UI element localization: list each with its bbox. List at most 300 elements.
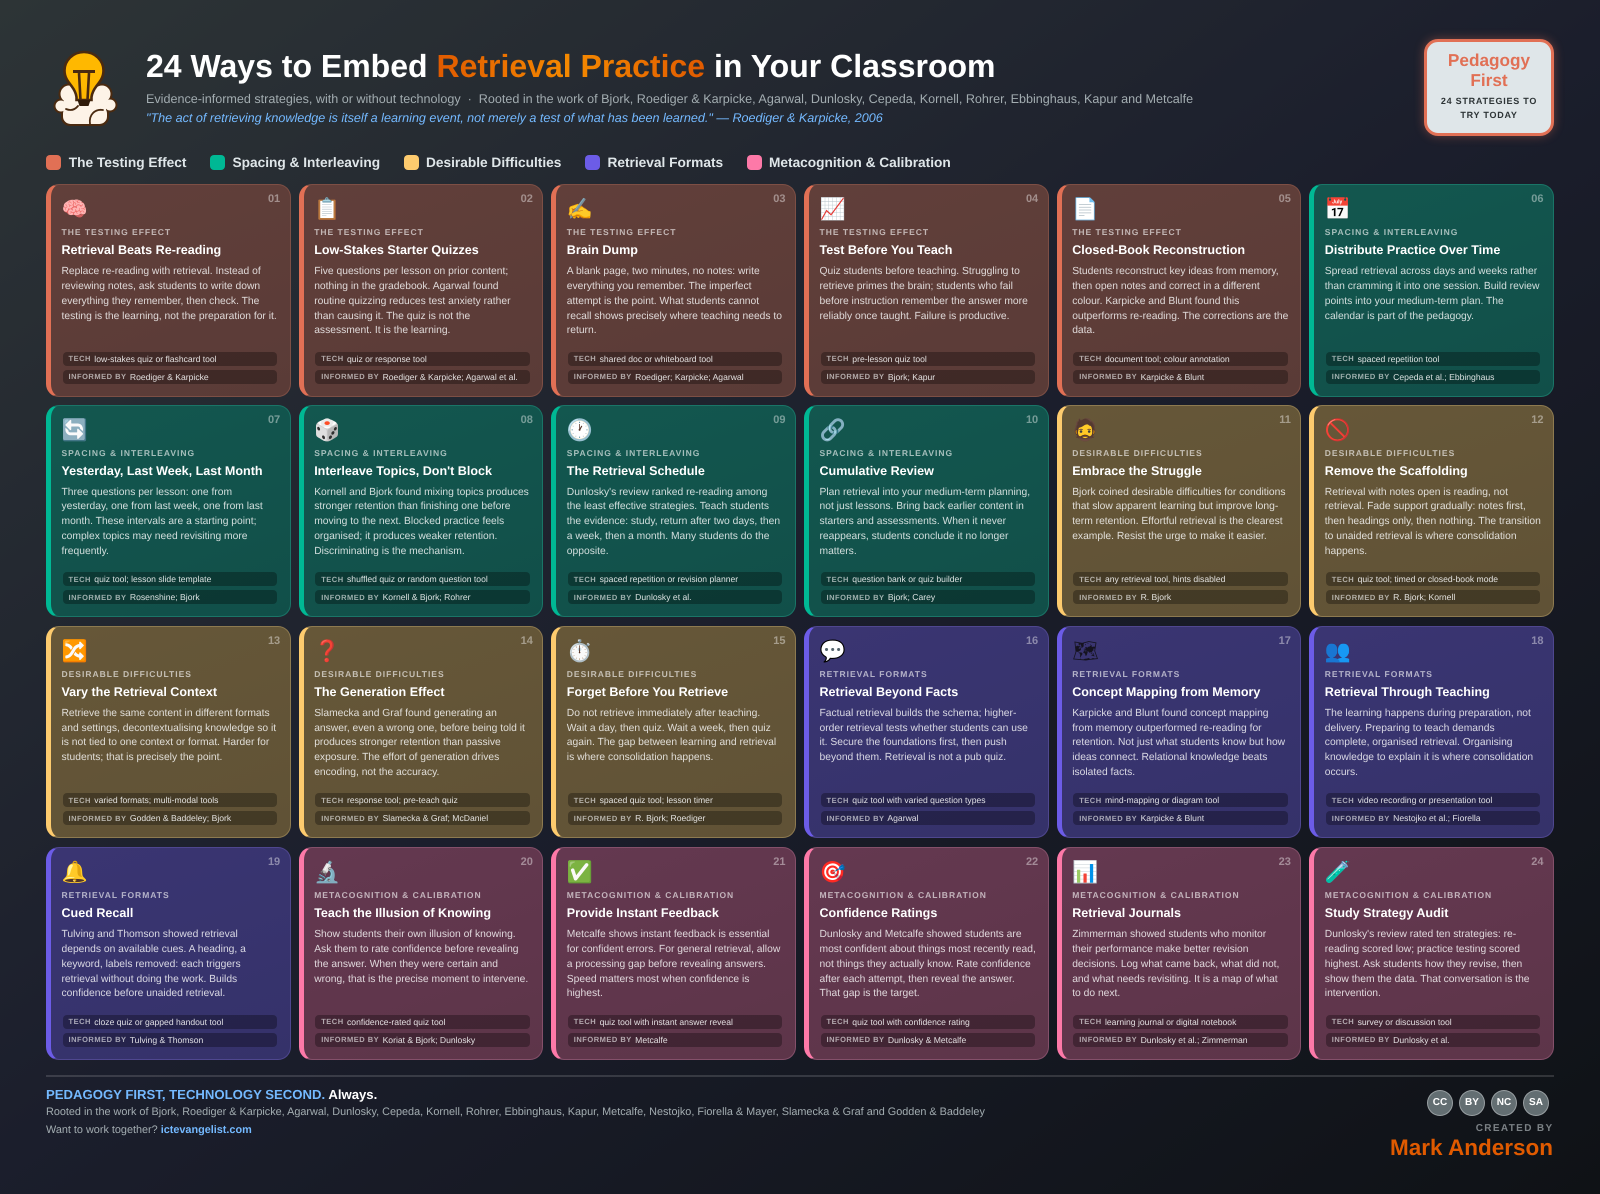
tech: TECH cloze quiz or gapped handout tool [68,1016,223,1026]
licence icon: CC [1427,1090,1453,1116]
number: 17 [1279,635,1291,647]
body: to do next. [1072,988,1120,999]
informed by [1326,811,1540,825]
informed by: INFORMED BY R. Bjork [1079,592,1171,602]
tech [62,793,277,807]
body: complete, organised retrieval. Organising [1325,737,1513,748]
badge: 24 STRATEGIES TO [1441,96,1537,106]
body: the least effective strategies. Teach students [567,501,769,512]
title: 24 Ways to Embed Retrieval Practice in Your Classroom [146,48,996,84]
informed by: INFORMED BY Bjork; Carey [826,592,935,602]
informed by [315,590,530,604]
category: SPACING & INTERLEAVING [1325,227,1458,237]
body: organised; it produces weaker retention. [314,531,497,542]
number: 08 [521,414,533,426]
body: reappears, students conclude it no longer [820,531,1008,542]
icon: clipboard: 📋 [314,198,340,222]
body: again. The gap between learning and retrieval [567,737,776,748]
body: complex topics may need revisiting more [62,531,248,542]
number: 12 [1531,414,1543,426]
panel: card 15 [551,626,796,838]
body: Spread retrieval across days and weeks rather [1325,266,1537,277]
tech: TECH mind-mapping or diagram tool [1079,795,1219,805]
informed by [315,1032,530,1046]
panel: card 01 [46,184,291,396]
category: METACOGNITION & CALIBRATION [1325,890,1492,900]
icon: shuffle: 🔀 [62,640,88,664]
body: A blank page, two minutes, no notes: write [567,266,760,277]
body: knowledge to explain it is where consolidation [1325,752,1533,763]
number: 16 [1026,635,1038,647]
tech [820,793,1035,807]
panel: card 22 [804,847,1049,1060]
informed by: INFORMED BY Dunlosky et al.; Zimmerman [1079,1034,1248,1044]
icon: chart: 📈 [820,198,846,222]
body: Quiz students before teaching. Struggling to [820,266,1020,277]
body: moving to the next. Blocked practice feels [314,516,504,527]
body: reading scored low; practice testing scored [1325,944,1520,955]
body: Wait a day, then quiz. Wait a week, then quiz [567,723,771,734]
tech [62,1014,277,1028]
legend swatch: testing effect [46,155,61,170]
body: Ask them to rate confidence before revealing [314,944,519,955]
licence icon: BY: BY [1465,1097,1479,1108]
panel: card 21 [551,847,796,1060]
informed by [62,590,277,604]
card title: Distribute Practice Over Time [1325,243,1500,257]
tech [568,572,782,586]
panel: card 14 [299,626,543,838]
body: Dunlosky's review rated ten strategies: re- [1325,929,1516,940]
tech [568,1014,782,1028]
tech: TECH quiz or response tool [321,354,427,364]
informed by: INFORMED BY Roediger; Karpicke; Agarwal [574,372,744,382]
body: their performance make better revision [1072,944,1248,955]
created by label: CREATED BY [1476,1122,1554,1134]
body: That gap is the target. [820,988,920,999]
body: starters and assessments. When it never [820,516,1006,527]
panel: card 07 [46,404,291,617]
body: yesterday, one from last week, one from last [62,501,263,512]
icon: calendar: 📅 [1325,198,1351,222]
card title: Brain Dump [567,243,638,257]
panel: card 23 [1057,847,1301,1060]
informed by [315,370,530,384]
badge: Pedagogy [1448,50,1530,70]
card title: Cumulative Review [820,464,934,478]
body [62,266,277,322]
panel: card 20 [299,847,543,1060]
informed by: INFORMED BY Karpicke & Blunt [1079,372,1204,382]
tech: TECH quiz tool with varied question types [826,795,986,805]
tech: TECH quiz tool; lesson slide template [68,574,211,584]
informed by [820,370,1035,384]
panel: card 06 [1309,184,1554,396]
icon: link: 🔗 [820,418,846,442]
body: beyond them. Retrieval is not a pub quiz. [820,752,1006,763]
body: reviewing notes, ask students to write down [62,281,260,292]
body: testing is the learning, not the preparation for it. [62,311,277,322]
number: 03 [773,193,785,205]
author name: Mark Anderson [1390,1135,1553,1160]
body: everything you remember. The imperfect [567,281,751,292]
body [314,708,525,778]
body: Three questions per lesson: one from [62,487,232,498]
tech [820,352,1035,366]
icon: check mark: ✅ [567,861,593,885]
informed by [1073,1032,1288,1046]
legend label: spacing: Spacing & Interleaving [232,155,380,170]
card title: Vary the Retrieval Context [62,685,217,699]
number: 01 [268,193,280,205]
card title: Teach the Illusion of Knowing [314,906,491,920]
body: from memory outperformed re-reading for [1072,723,1262,734]
body: after each attempt, then reveal the answer. [820,974,1015,985]
body [314,266,511,336]
body: a processing gap before revealing answers. [567,959,766,970]
category: SPACING & INTERLEAVING [314,448,448,458]
footer tagline: PEDAGOGY FIRST, TECHNOLOGY SECOND. Always. [46,1087,377,1102]
body: it. Secure the foundations first, then push [820,737,1007,748]
body: calendar is part of the pedagogy. [1325,311,1474,322]
body: Kornell and Bjork found mixing topics produces [314,487,529,498]
tech: TECH quiz tool; timed or closed-book mode [1332,574,1498,584]
informed by: INFORMED BY Nestojko et al.; Fiorella [1332,813,1481,823]
body: Students reconstruct key ideas from memory, [1072,266,1279,277]
tech [315,1014,530,1028]
legend swatch: metacognition [746,155,762,170]
body: retrieve primes the brain; students who fail [820,281,1013,292]
informed by [568,1032,782,1046]
informed by: INFORMED BY Roediger & Karpicke [68,372,209,382]
body: before instruction remember the answer more [820,296,1028,307]
category: RETRIEVAL FORMATS [62,890,170,900]
tech [315,352,530,366]
tech: TECH video recording or presentation tool [1332,795,1492,805]
informed by: INFORMED BY Metcalfe [574,1034,668,1044]
tech: TECH any retrieval tool, hints disabled [1079,574,1225,584]
category: DESIRABLE DIFFICULTIES [567,669,697,679]
category: DESIRABLE DIFFICULTIES [62,669,192,679]
body: assessment. It is the learning. [314,325,450,336]
category: METACOGNITION & CALIBRATION [1072,890,1240,900]
body: Factual retrieval builds the schema; higher- [820,708,1016,719]
body [566,266,782,336]
panel: card 19 [46,847,291,1060]
informed by: INFORMED BY R. Bjork; Roediger [574,813,705,823]
icon: die: 🎲 [314,418,340,442]
body: Metcalfe shows instant feedback is essential [567,929,769,940]
body: Slamecka and Graf found generating an [314,708,497,719]
card title: Interleave Topics, Don't Block [314,464,492,478]
panel: card 18 [1309,626,1554,838]
body: Speed matters most when confidence is [567,974,749,985]
category: METACOGNITION & CALIBRATION [314,890,482,900]
body: show them the data. That conversation is the [1325,974,1530,985]
body: happens. [1325,546,1367,557]
category: METACOGNITION & CALIBRATION [567,890,734,900]
icon: test tube: 🧪 [1325,861,1351,885]
icon: brain: 🧠 [62,198,88,222]
footer sources: Rooted in the work of Bjork, Roediger & Karpicke, Agarwal, Dunlosky, Cepeda, Kornell, Rohrer, Ebbinghaus, Kapur, Metcalfe, Nestojko, Fiorella & Mayer, Slamecka & Graf and Godden & Baddeley [46,1106,985,1118]
card title: Remove the Scaffolding [1325,464,1468,478]
body: to unaided retrieval is where consolidation [1325,531,1517,542]
card title: Closed-Book Reconstruction [1072,243,1245,257]
category: DESIRABLE DIFFICULTIES [1072,448,1203,458]
informed by [1073,590,1288,604]
body [1072,266,1288,336]
legend swatch: spacing [210,155,224,170]
icon: speech bubble: 💬 [820,640,846,664]
number: 18 [1531,635,1543,647]
body [1072,487,1286,542]
informed by [315,811,530,825]
informed by: INFORMED BY Roediger & Karpicke; Agarwal et al. [321,372,518,382]
panel: card 10 [804,404,1049,617]
body: data. [1072,325,1095,336]
body: answer, even a wrong one, before being told it [314,723,525,734]
tech: TECH pre-lesson quiz tool [826,354,927,364]
body [820,929,1036,999]
informed by: INFORMED BY Koriat & Bjork; Dunlosky [321,1034,475,1044]
badge [1424,39,1554,136]
informed by [568,811,782,825]
body: Tulving and Thomson showed retrieval [62,929,238,940]
body: points into your medium-term plan. The [1325,296,1504,307]
informed by [1326,590,1540,604]
informed by: INFORMED BY R. Bjork; Kornell [1332,592,1455,602]
body: Retrieval with notes open is reading, not [1325,487,1508,498]
icon: target: 🎯 [820,861,846,885]
category: RETRIEVAL FORMATS [820,669,928,679]
informed by [1073,811,1288,825]
icon: prohibited: 🚫 [1325,418,1351,442]
body: example. Resist the urge to make it easier. [1072,531,1267,542]
number: 22 [1026,856,1038,868]
tech [1326,1014,1540,1028]
tech [1073,793,1288,807]
body: than cramming it into one session. Build review [1325,281,1539,292]
informed by [568,590,782,604]
tech [315,572,530,586]
card title: Embrace the Struggle [1072,464,1202,478]
tech [1073,352,1288,366]
body: not just lessons. Bring back earlier content in [820,501,1024,512]
icon: repeat: 🔄 [62,418,88,442]
body: then open notes and correct in a different [1072,281,1260,292]
body [566,708,776,763]
tech: TECH varied formats; multi-modal tools [68,795,218,805]
informed by: INFORMED BY Bjork; Kapur [826,372,935,382]
category: SPACING & INTERLEAVING [820,448,953,458]
icon: document: 📄 [1072,198,1098,222]
icon: microscope: 🔬 [314,861,340,885]
category: THE TESTING EFFECT [820,227,929,237]
body: The learning happens during preparation, not [1325,708,1531,719]
informed by [62,1032,277,1046]
badge: TRY TODAY [1460,110,1518,120]
number: 04 [1026,193,1038,205]
informed by [820,1032,1035,1046]
body: encoding, not the accuracy. [314,767,439,778]
panel: card 17 [1057,626,1301,838]
quote: "The act of retrieving knowledge is itself a learning event, not merely a test of what has been learned." — Roediger & Karpicke, 2006 [146,110,883,124]
card title: Study Strategy Audit [1325,906,1448,920]
number: 02 [521,193,533,205]
body [1072,929,1279,999]
informed by [1073,370,1288,384]
licence icon: BY [1459,1090,1485,1116]
panel: card 04 [804,184,1049,396]
tech: TECH survey or discussion tool [1332,1016,1452,1026]
tech [62,352,277,366]
number: 13 [268,635,280,647]
tech: TECH question bank or quiz builder [826,574,962,584]
body: occurs. [1325,767,1358,778]
card title: Retrieval Through Teaching [1325,685,1490,699]
card title: Cued Recall [62,906,133,920]
informed by: INFORMED BY Slamecka & Graf; McDaniel [321,813,488,823]
body: month. These intervals are a starting point; [62,516,256,527]
licence icon: SA [1523,1090,1549,1116]
card title: Retrieval Journals [1072,906,1181,920]
licence icon: NC [1491,1090,1517,1116]
informed by: INFORMED BY Tulving & Thomson [68,1034,203,1044]
card title: Confidence Ratings [820,906,937,920]
card title: Forget Before You Retrieve [567,685,728,699]
number: 21 [773,856,785,868]
panel: card 02 [299,184,543,396]
tech [62,572,277,586]
tech [1073,572,1288,586]
body [566,487,780,557]
body: Do not retrieve immediately after teaching. [567,708,760,719]
icon: question mark: ❓ [314,640,340,664]
tech: TECH shuffled quiz or random question tool [321,574,488,584]
body: recall shows precisely where teaching needs to [567,311,782,322]
body: opposite. [567,546,609,557]
subtitle: Evidence-informed strategies, with or without technology · Rooted in the work of Bjork, Roediger & Karpicke, Agarwal, Dunlosky, Cepeda, Kornell, Rohrer, Ebbinghaus, Kapur and Metcalfe [146,92,1193,106]
icon: lightbulb and brain logo [54,50,118,126]
licence icon: SA: SA [1529,1097,1543,1108]
body: that slow apparent learning but improve long- [1072,501,1278,512]
card title: The Generation Effect [314,685,445,699]
card title: Concept Mapping from Memory [1072,685,1260,699]
body [1072,708,1286,778]
body [820,266,1028,322]
panel: card 03 [551,184,796,396]
category: DESIRABLE DIFFICULTIES [1325,448,1455,458]
category: SPACING & INTERLEAVING [567,448,700,458]
body: a week, then a month. Many students do the [567,531,769,542]
informed by: INFORMED BY Agarwal [826,813,918,823]
tech: TECH quiz tool with instant answer reveal [574,1016,733,1026]
informed by [820,811,1035,825]
number: 07 [268,414,280,426]
tech [820,1014,1035,1028]
body: Five questions per lesson on prior content; [314,266,508,277]
body: the answer. When they were certain and [314,959,498,970]
body: everything they remember, then check. The [62,296,259,307]
icon: bearded face: 🧔 [1072,418,1098,442]
informed by: INFORMED BY Karpicke & Blunt [1079,813,1204,823]
body [566,929,780,999]
category: THE TESTING EFFECT [314,227,424,237]
tech: TECH spaced repetition tool [1332,354,1439,364]
tech: TECH shared doc or whiteboard tool [574,354,713,364]
icon: writing hand: ✍️ [567,198,593,222]
icon: map: 🗺 [1072,640,1099,663]
number: 19 [268,856,280,868]
body [62,929,246,999]
card title: Provide Instant Feedback [567,906,719,920]
icon: stopwatch: ⏱️ [567,640,593,664]
body: isolated facts. [1072,767,1135,778]
tech [568,352,782,366]
category: METACOGNITION & CALIBRATION [820,890,987,900]
body: depends on available cues. A heading, a [62,944,246,955]
body: intervention. [1325,988,1381,999]
body: highest. Ask students how they revise, then [1325,959,1522,970]
panel: card 12 [1309,404,1554,617]
legend label: formats: Retrieval Formats [608,155,723,170]
informed by [62,370,277,384]
tech [1073,1014,1288,1028]
body: term retention. Effortful retrieval is the clearest [1072,516,1283,527]
card title: Retrieval Beats Re-reading [62,243,221,257]
tech: TECH document tool; colour annotation [1079,354,1230,364]
tech: TECH learning journal or digital notebook [1079,1016,1236,1026]
body: then headings only, then nothing. The transition [1325,516,1541,527]
legend label: testing effect: The Testing Effect [69,155,186,170]
panel: card 11 [1057,404,1301,617]
informed by: INFORMED BY Godden & Baddeley; Bjork [68,813,231,823]
tech [820,572,1035,586]
body: Zimmerman showed students who monitor [1072,929,1266,940]
tech: TECH low-stakes quiz or flashcard tool [68,354,217,364]
icon: people: 👥 [1325,640,1351,664]
body: highest. [567,988,603,999]
footer contact: Want to work together? ictevangelist.com [46,1124,252,1136]
body: reliably once taught. Failure is productive. [820,311,1010,322]
body: retrieval. Fade support gradually: notes first, [1325,501,1526,512]
body: return. [567,325,597,336]
body [62,708,276,763]
body [314,929,528,985]
legend [46,155,951,170]
informed by: INFORMED BY Dunlosky et al. [574,592,692,602]
badge: First [1470,70,1508,90]
number: 11 [1279,414,1291,426]
informed by: INFORMED BY Dunlosky & Metcalfe [826,1034,966,1044]
category: RETRIEVAL FORMATS [1072,669,1180,679]
body: nothing in the gradebook. Agarwal found [314,281,499,292]
tech: TECH spaced quiz tool; lesson timer [574,795,713,805]
tech: TECH response tool; pre-teach quiz [321,795,458,805]
number: 23 [1279,856,1291,868]
card title: Retrieval Beyond Facts [820,685,958,699]
body: is where consolidation happens. [567,752,713,763]
card title: Yesterday, Last Week, Last Month [62,464,263,478]
tech [1326,352,1540,366]
tech [315,793,530,807]
panel: card 24 [1309,847,1554,1060]
icon: bar chart: 📊 [1072,861,1098,885]
tech: TECH confidence-rated quiz tool [321,1016,445,1026]
body: Plan retrieval into your medium-term planning, [820,487,1030,498]
body: for confident errors. For general retrieval, allow [567,944,780,955]
body [820,487,1030,557]
